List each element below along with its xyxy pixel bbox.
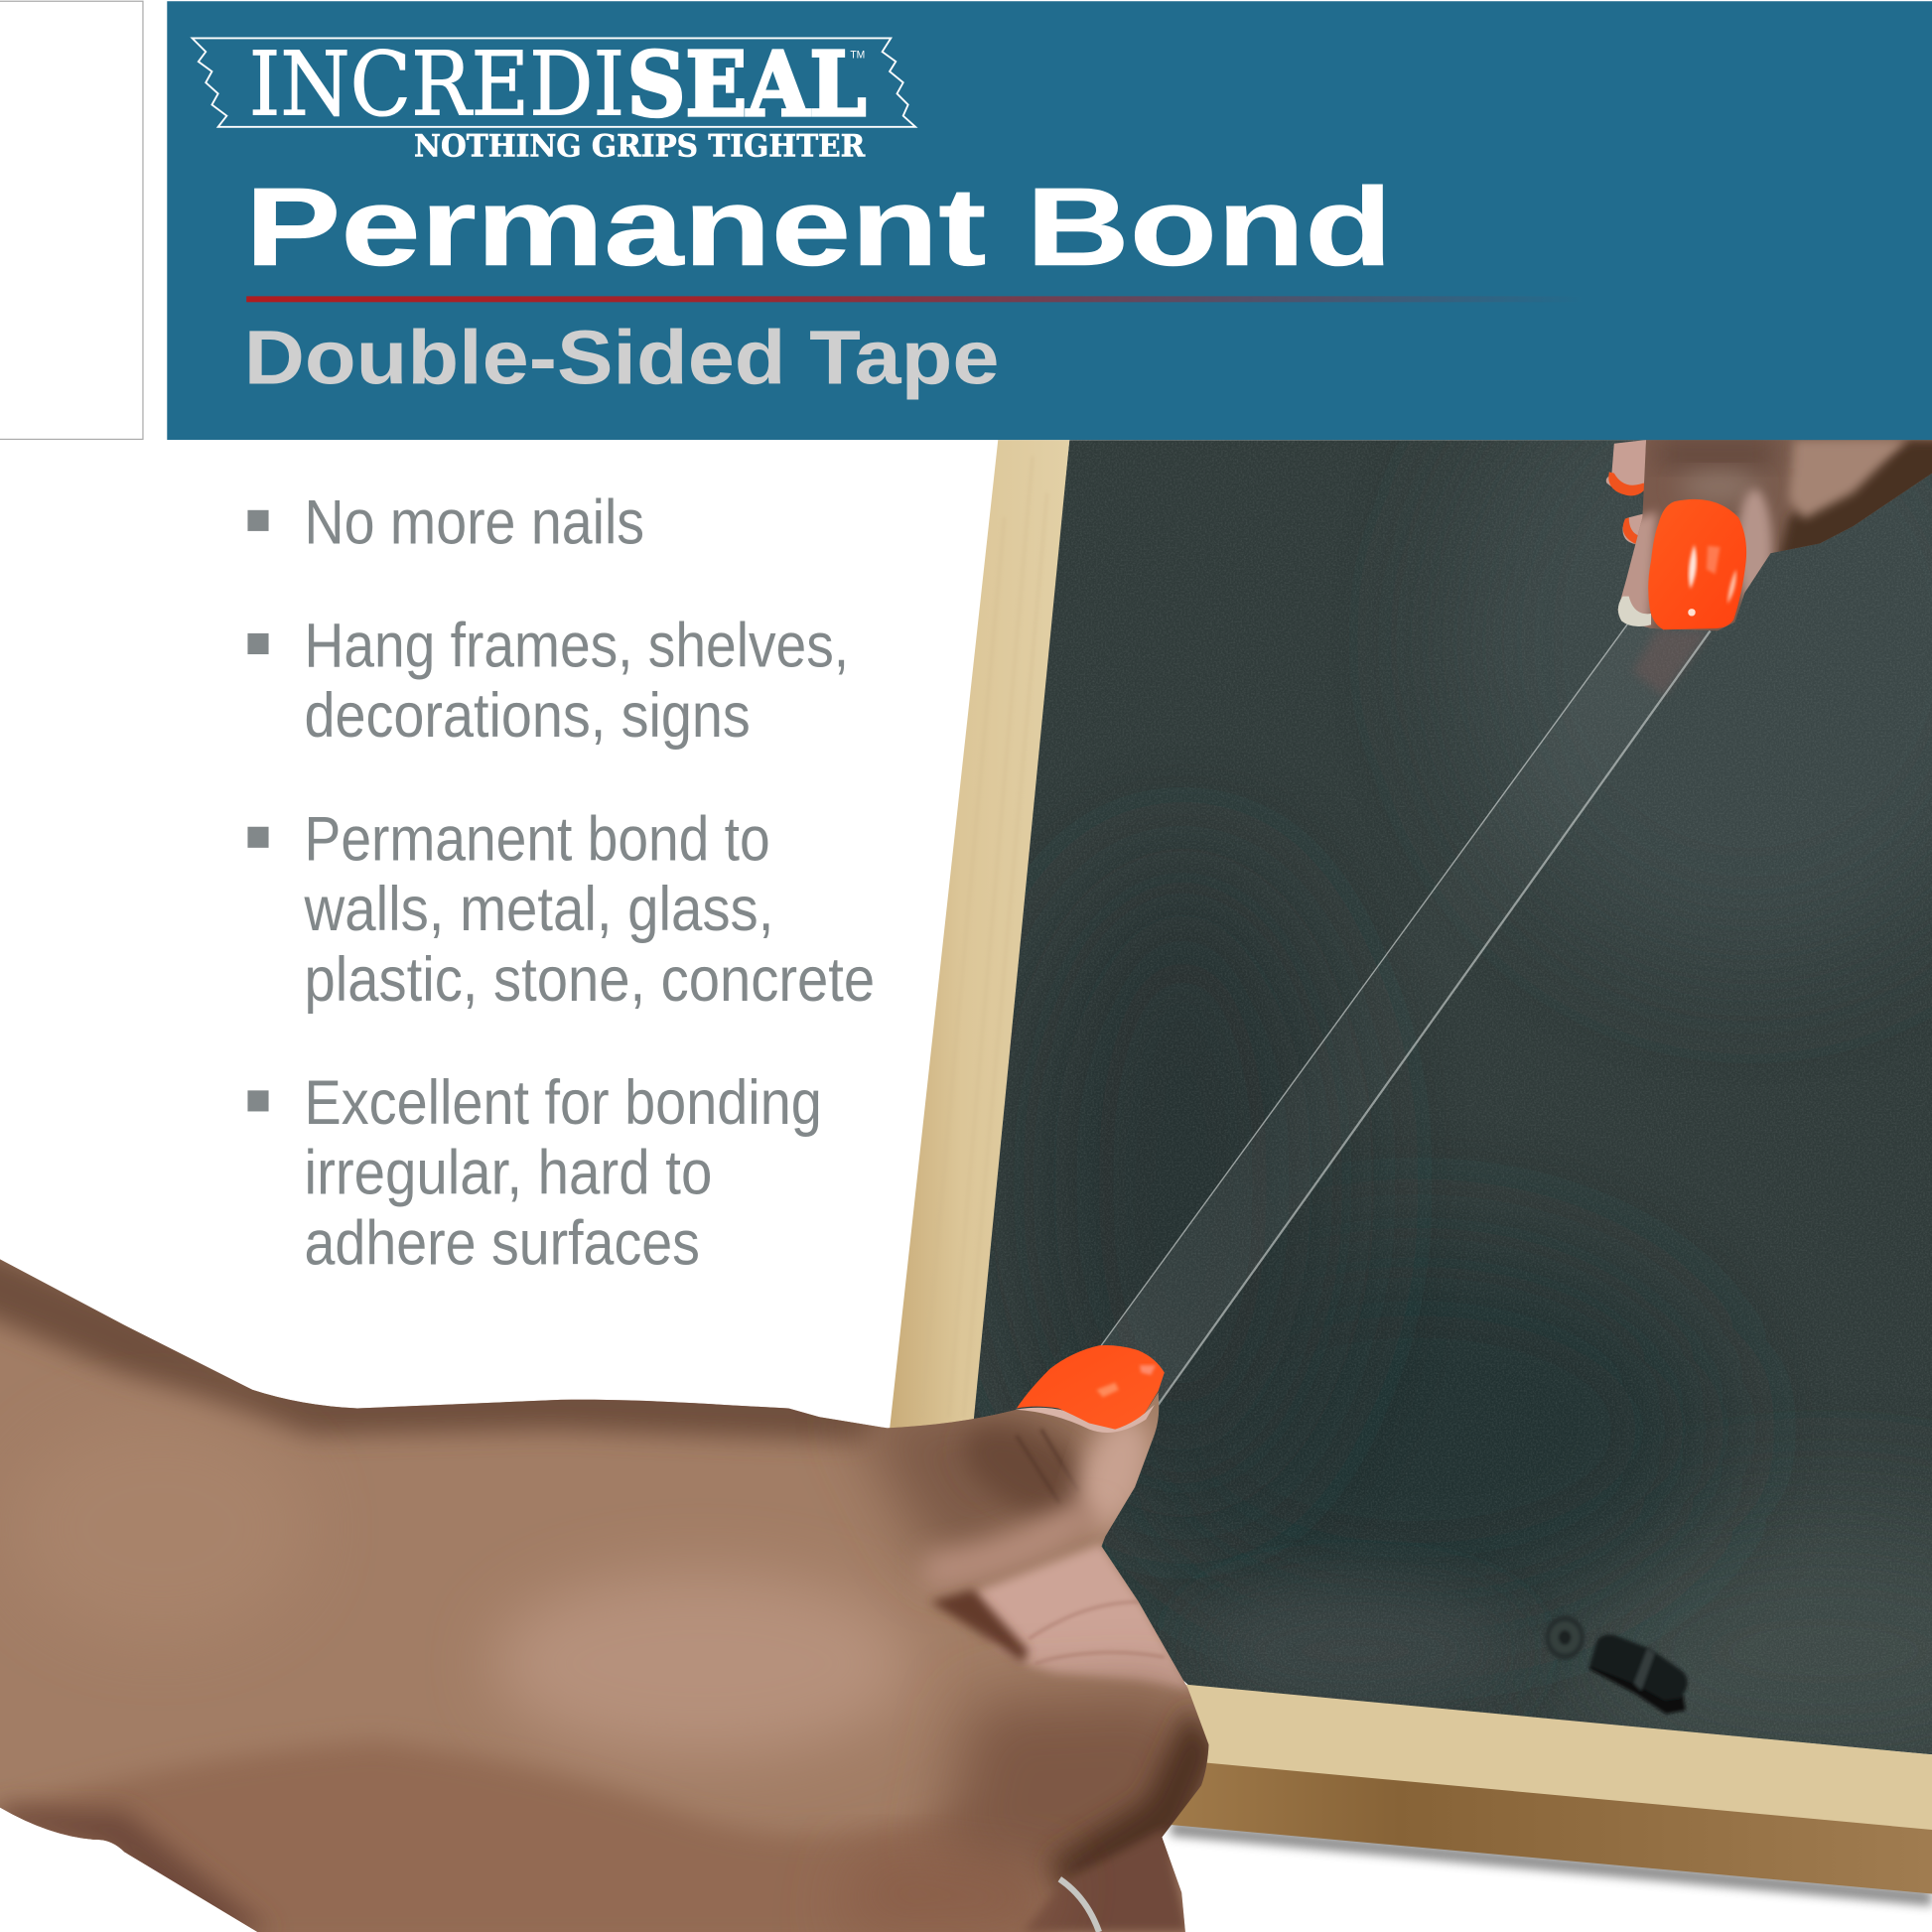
- chalkboard surface: [973, 440, 1932, 1755]
- bullet: permanent bond: Permanent bond to: [305, 804, 770, 874]
- logo wordmark: INCREDI: [249, 33, 624, 136]
- wooden frame left rail: [890, 440, 1069, 1430]
- wooden frame bottom rail top face: [1171, 1683, 1932, 1832]
- lower hand: [0, 1238, 1220, 1932]
- hanger clip: [1588, 1634, 1688, 1714]
- bullet: permanent bond: [247, 804, 875, 1015]
- bullet: no more nails: No more nails: [305, 487, 644, 557]
- logo: IncrediSeal: TM: [850, 49, 865, 61]
- skin shading: [0, 1238, 1220, 1932]
- clear double-sided tape strip: [1100, 622, 1711, 1405]
- bullet list: [247, 487, 875, 1278]
- inner index finger: [973, 1544, 1192, 1691]
- logo tagline: NOTHING GRIPS TIGHTER: [414, 129, 866, 165]
- red rule: [246, 296, 1584, 302]
- upper hand: [1601, 440, 1932, 637]
- bullet: permanent bond: walls, metal, glass,: [304, 875, 773, 944]
- ring: [1059, 1879, 1099, 1932]
- lower finger: [1023, 1830, 1189, 1932]
- thumb nail halo: [1016, 1405, 1155, 1433]
- title: Permanent Bond: [245, 165, 1392, 289]
- bullet: permanent bond: plastic, stone, concrete: [305, 945, 875, 1015]
- base skin: [0, 1259, 1208, 1932]
- bullet: excellent for bonding: irregular, hard to: [305, 1139, 712, 1208]
- finger and palm: [1601, 440, 1932, 637]
- logo ribbon outline: [193, 38, 915, 127]
- hanger screw: [1545, 1615, 1585, 1660]
- rear fingertips with orange polish: [1606, 440, 1646, 546]
- bullet: hang frames: Hang frames, shelves,: [305, 611, 849, 680]
- white fingertip nail edge: [1618, 597, 1651, 626]
- board shadow: [1171, 1821, 1932, 1906]
- bullet: excellent for bonding: adhere surfaces: [305, 1208, 700, 1278]
- knuckle shading: [936, 1691, 1220, 1897]
- header banner: [167, 1, 1932, 440]
- subtitle: Double-Sided Tape: [244, 316, 1000, 401]
- bullet: hang frames: decorations, signs: [305, 681, 751, 751]
- bullet: hang frames: [247, 611, 849, 751]
- bullet: excellent for bonding: Excellent for bonding: [305, 1068, 822, 1138]
- left white placeholder box: [0, 1, 143, 439]
- dark crease: [930, 1589, 1029, 1663]
- orange fingernail upper: [1648, 499, 1746, 629]
- wooden frame bottom rail side face: [1171, 1759, 1932, 1894]
- logo: IncrediSeal: [193, 33, 915, 165]
- orange thumbnail: [1017, 1345, 1165, 1430]
- logo: IncrediSeal: SEAL: [627, 33, 866, 137]
- bullet: excellent for bonding: [247, 1068, 822, 1278]
